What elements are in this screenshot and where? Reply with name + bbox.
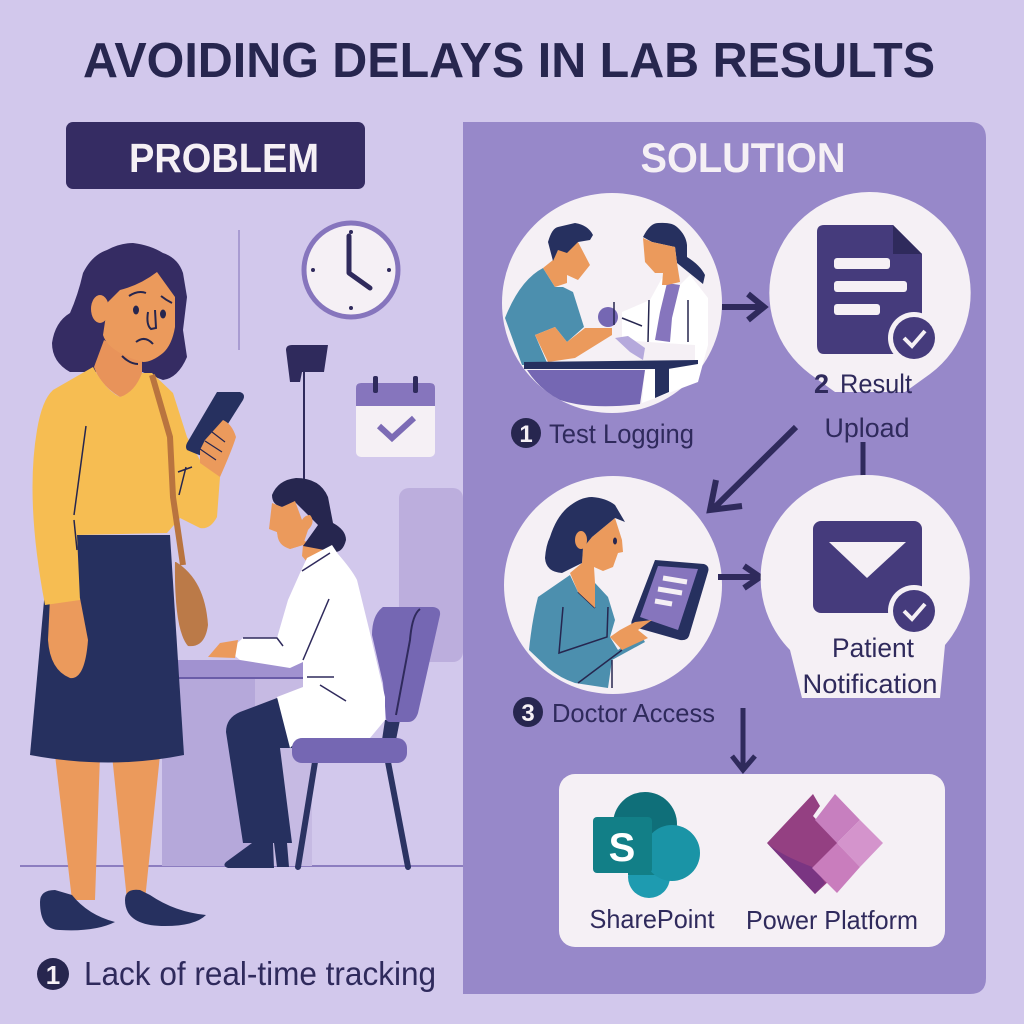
icon: calendar — [356, 376, 435, 457]
step 1: test logging — [502, 193, 722, 413]
step 2 label: Upload — [824, 413, 910, 443]
step 3 label: 3 — [521, 700, 535, 727]
standing patient figure — [30, 243, 244, 930]
problem scene: clinic backdrop — [20, 230, 463, 866]
step 1 label: 1 — [519, 421, 533, 448]
title: AVOIDING DELAYS IN LAB RESULTS — [83, 34, 935, 88]
icon: Power Platform — [767, 794, 883, 894]
step 3 label: Doctor Access — [552, 698, 715, 728]
problem heading — [66, 122, 365, 189]
label: Power Platform: Power Platform — [746, 905, 918, 935]
arrow — [722, 294, 764, 320]
panel: solution background — [463, 122, 986, 994]
label: SharePoint: SharePoint — [590, 904, 715, 934]
icon: SharePoint: S — [609, 826, 635, 870]
step 3: doctor access — [504, 476, 722, 694]
arrow: upload to doctor access — [710, 427, 796, 510]
icon: wall clock — [304, 223, 398, 317]
seated doctor figure — [208, 478, 440, 868]
problem heading: PROBLEM — [129, 135, 319, 181]
step 2 label: 2 — [814, 369, 829, 399]
solution heading: SOLUTION — [640, 134, 846, 181]
step 2 label — [814, 369, 912, 443]
connector — [860, 442, 866, 476]
arrow — [718, 566, 760, 588]
tools panel — [559, 774, 945, 947]
step 1 label: Test Logging — [549, 419, 694, 449]
step 4: patient notification: Notification — [802, 669, 938, 699]
problem caption: 1 — [46, 960, 60, 990]
step 4: patient notification — [761, 475, 970, 699]
arrow: down to tools — [732, 708, 755, 770]
step 4: patient notification: Patient — [832, 633, 914, 663]
icon: SharePoint — [593, 792, 700, 898]
problem caption: Lack of real-time tracking — [84, 955, 436, 992]
step 2 label: Result — [840, 369, 912, 399]
step 2: result upload — [769, 192, 971, 392]
